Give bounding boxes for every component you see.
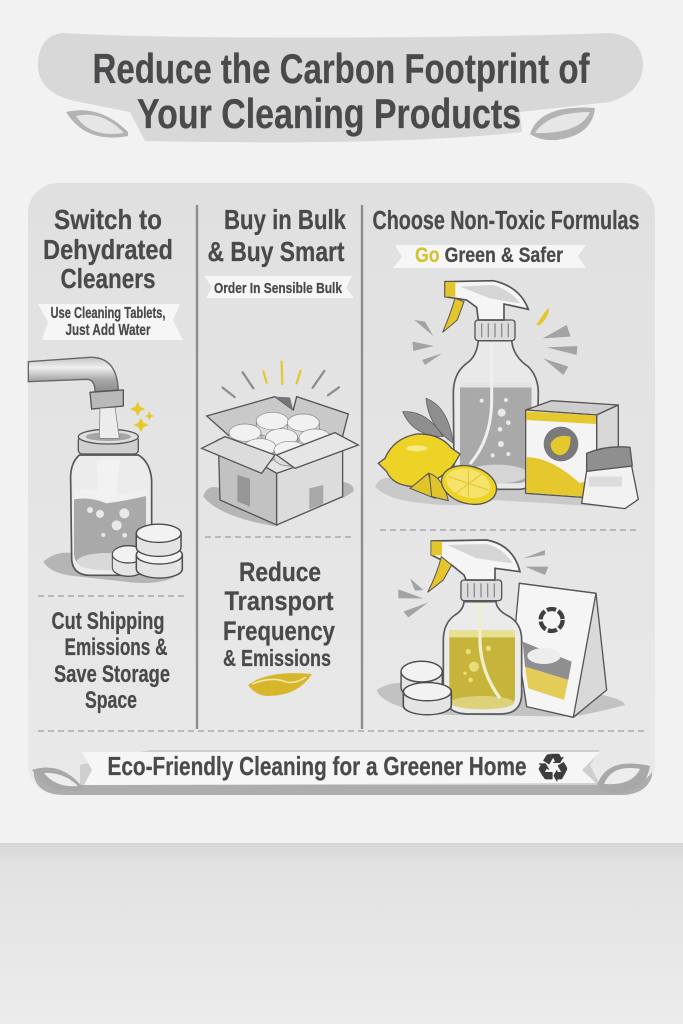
icon: jar: [71, 429, 152, 575]
icon: burst marks: [398, 550, 548, 617]
heading: switch to dehydrated cleaners: Dehydrated: [43, 234, 173, 265]
icon: lemon slice: [437, 460, 501, 510]
text: cut shipping emissions: Emissions &: [64, 634, 168, 661]
heading: buy in bulk: & Buy Smart: [208, 236, 344, 267]
illustration: yellow spray bottle, tablets and pouch: [377, 540, 625, 717]
heading: switch to dehydrated cleaners: Switch to: [54, 204, 162, 235]
column dividers: [197, 205, 362, 729]
icon: whole lemon: [378, 434, 460, 487]
icon: tablets in box: [229, 412, 331, 466]
water stream: [99, 407, 119, 438]
icon: faucet: [28, 357, 123, 409]
heading: buy in bulk: [208, 204, 346, 267]
text: reduce transport frequency: Frequency: [223, 616, 335, 646]
title text: Your Cleaning Products: [137, 90, 521, 137]
ribbon folds: [80, 750, 600, 785]
icon: recycling pouch: [515, 583, 607, 717]
panel: buy in bulk: [202, 204, 358, 696]
heading: buy in bulk: Buy in Bulk: [224, 204, 346, 235]
ribbon: use cleaning tablets: Just Add Water: [66, 322, 150, 339]
heading: switch to dehydrated cleaners: [43, 204, 173, 294]
dashed separators: [38, 530, 646, 731]
icon: sparkles: [130, 402, 154, 432]
title text: [92, 45, 590, 137]
text: cut shipping emissions: [52, 608, 170, 714]
floor band: [0, 843, 683, 1024]
icon: burst marks: [412, 320, 577, 375]
icon: spray bottle: [443, 281, 538, 489]
icon: footer leaf left: [32, 768, 85, 791]
icon: stacked tablets: [401, 661, 451, 715]
text: reduce transport frequency: [223, 557, 335, 671]
bottom panel edge: [34, 772, 652, 795]
icon: yellow spray bottle: [428, 540, 522, 714]
icon: title leaf right: [530, 108, 595, 140]
text: reduce transport frequency: Transport: [224, 586, 334, 616]
ribbon: go green and safer: Go Green & Safer: [415, 244, 563, 267]
icon: leaves: [403, 398, 453, 443]
panel: dehydrated cleaners: [28, 204, 183, 714]
text: cut shipping emissions: Space: [85, 687, 137, 714]
panel: non-toxic formulas: [372, 207, 640, 717]
icon: title leaf left: [66, 110, 128, 138]
icon: radiating rays: [223, 362, 339, 397]
icon: product box: [526, 401, 618, 498]
icon: recycle symbol: ♻: [536, 746, 570, 790]
icon: footer leaf right: [597, 764, 650, 793]
icon: cleaning tablets: [112, 524, 182, 578]
text: cut shipping emissions: Cut Shipping: [52, 608, 164, 635]
footer ribbon: [82, 752, 600, 785]
footer text: Eco-Friendly Cleaning for a Greener Home: [108, 751, 526, 781]
text: cut shipping emissions: Save Storage: [54, 661, 170, 688]
text: reduce transport frequency: & Emissions: [223, 645, 331, 671]
icon: lemon wedges: [410, 473, 448, 501]
heading: switch to dehydrated cleaners: Cleaners: [60, 263, 156, 294]
footer banner: [32, 746, 650, 793]
text: reduce transport frequency: Reduce: [239, 557, 321, 587]
title banner: [38, 33, 643, 142]
icon: yellow leaf: [248, 673, 312, 696]
illustration: spray bottle, lemons, box and jar: [375, 281, 638, 510]
ribbon: use cleaning tablets: Use Cleaning Tablets,: [50, 305, 166, 322]
illustration: open box of tablets: [202, 362, 358, 527]
ribbon: order in sensible bulk: Order In Sensible Bulk: [214, 280, 343, 297]
ribbon: use cleaning tablets: [38, 304, 183, 340]
ribbon: order in sensible bulk: [204, 276, 354, 298]
illustration: faucet, jar and tablets: [28, 357, 182, 583]
icon: small jar: [582, 447, 638, 509]
main panel: [28, 183, 655, 795]
